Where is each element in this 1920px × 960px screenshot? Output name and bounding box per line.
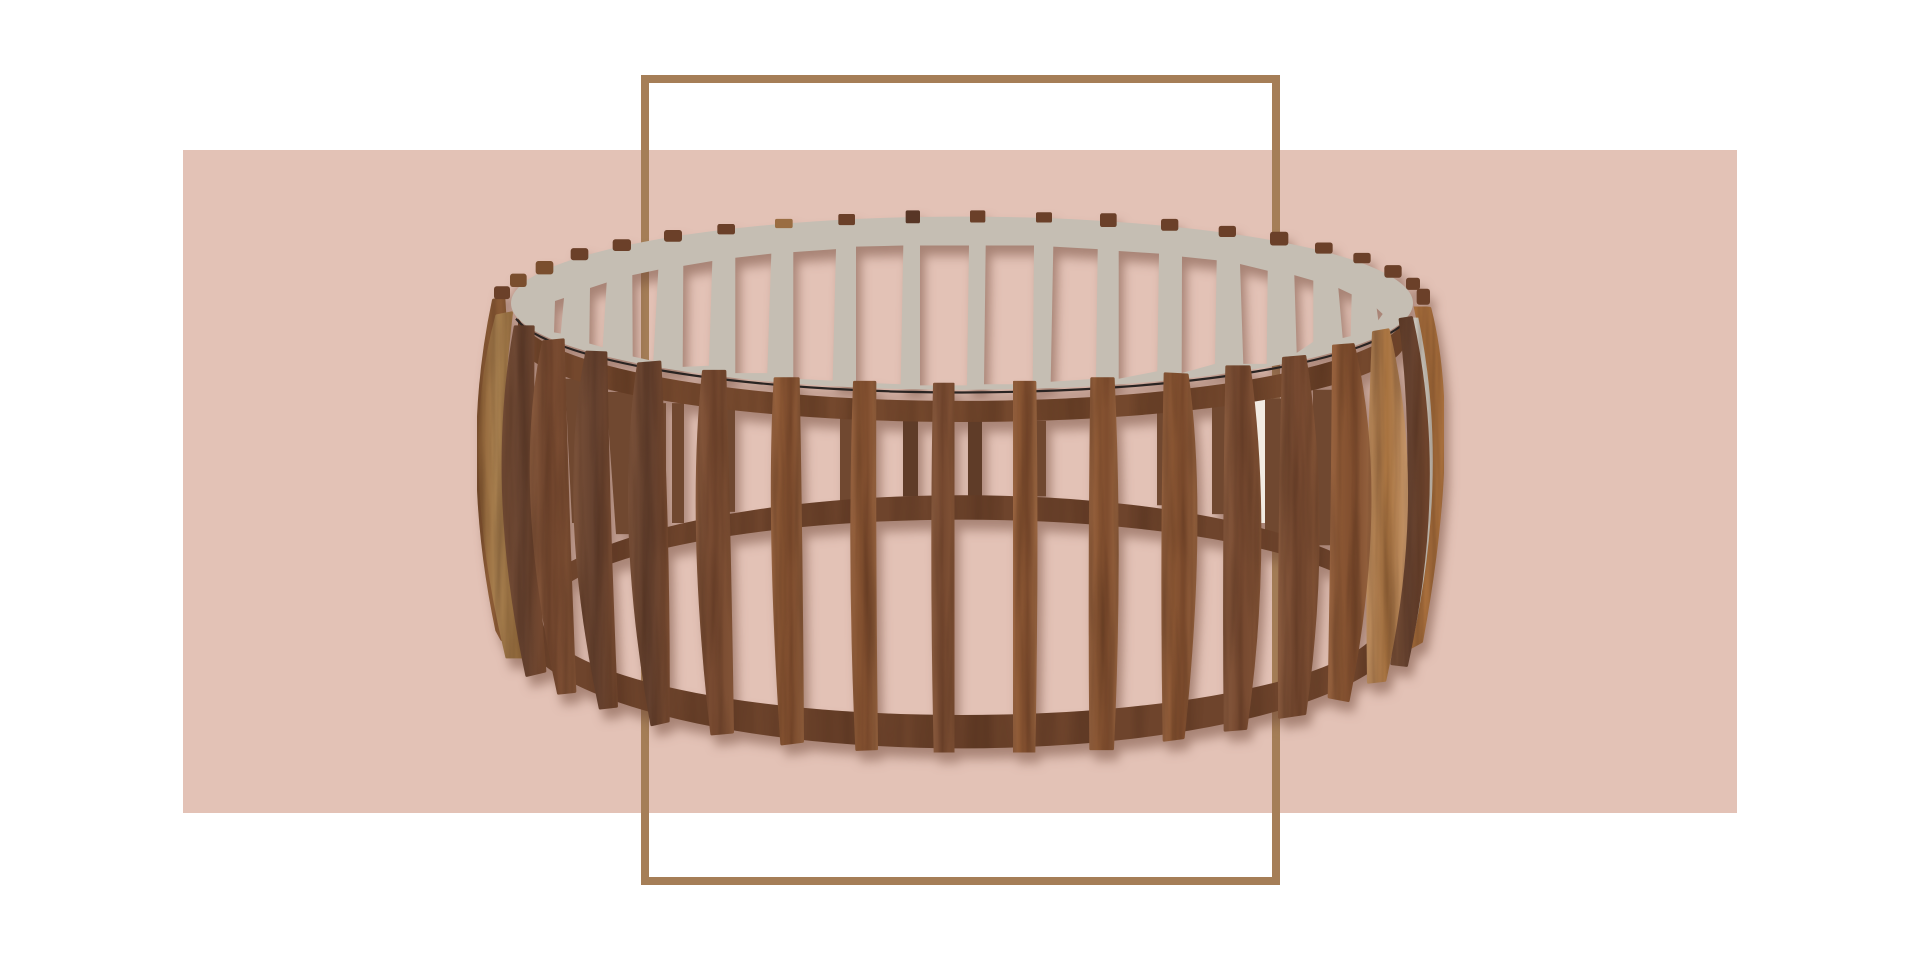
- back slats behind the table: [565, 379, 1332, 545]
- light gaps seen through back slats: [633, 395, 1265, 523]
- slat peg tops on right: [970, 210, 1430, 305]
- panel: pink background band: [183, 150, 1737, 813]
- right front slats: [1013, 307, 1444, 752]
- table: slatted wood coffee table: [477, 210, 1444, 752]
- glass table top with cut-out reflections: [511, 217, 1413, 390]
- left front slats: [477, 298, 954, 752]
- slat peg tops on left: [494, 210, 920, 299]
- upper ring: [518, 312, 1406, 422]
- base ring: [517, 495, 1407, 748]
- frame: tan outline rectangle: [645, 79, 1276, 881]
- glass front edge: [516, 319, 1408, 392]
